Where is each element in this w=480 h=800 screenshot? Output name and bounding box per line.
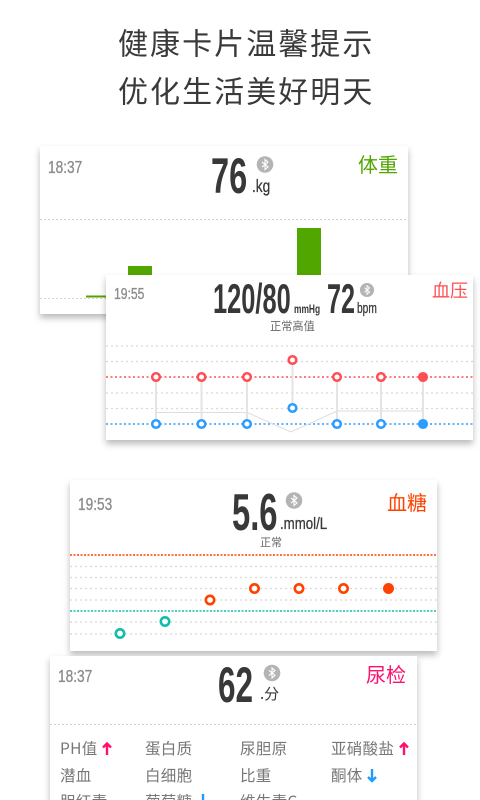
weight time: 18:37 xyxy=(48,158,82,178)
glucose value: 5.6 xyxy=(232,485,278,542)
glucose unit: .mmol/L xyxy=(280,515,327,533)
urine items: 酮体 xyxy=(331,764,363,786)
urine items: 比重 xyxy=(240,764,272,786)
weight unit: .kg xyxy=(252,177,270,197)
bp value: 120/80 xyxy=(213,277,291,323)
title xyxy=(118,20,374,112)
urine label: 尿检 xyxy=(366,659,406,688)
bp unit: mmHg xyxy=(294,304,320,316)
bp label: 血压 xyxy=(432,277,468,303)
panel: blood pressure card xyxy=(106,275,473,440)
title: 优化生活美好明天 xyxy=(118,68,374,112)
icon: bluetooth glucose xyxy=(286,492,302,509)
panel: weight card xyxy=(40,146,408,314)
weight value: 76 xyxy=(211,148,247,204)
title: 健康卡片温馨提示 xyxy=(118,20,374,64)
glucose time: 19:53 xyxy=(78,495,112,515)
bp time: 19:55 xyxy=(114,285,145,304)
urine items xyxy=(60,737,394,800)
bp chart xyxy=(106,346,473,432)
bp status: 正常高值 xyxy=(270,318,315,334)
icon: bluetooth weight xyxy=(257,156,273,173)
icon: bluetooth bp xyxy=(360,283,374,297)
arrows xyxy=(103,743,408,800)
panel: urine test card xyxy=(50,656,417,800)
weight bar chart xyxy=(86,228,321,298)
urine items: 尿胆原 xyxy=(240,737,287,759)
glucose status: 正常 xyxy=(260,534,282,550)
urine time: 18:37 xyxy=(58,667,92,687)
panel: blood glucose card xyxy=(70,480,437,651)
weight label: 体重 xyxy=(358,149,398,178)
icon: bluetooth urine xyxy=(264,665,280,681)
glucose label: 血糖 xyxy=(387,487,427,516)
glucose chart xyxy=(70,555,437,638)
urine items: 亚硝酸盐 xyxy=(331,737,394,759)
bp pulse unit: bpm xyxy=(357,299,377,317)
urine items: 蛋白质 xyxy=(145,737,192,759)
urine value: 62 xyxy=(218,657,253,713)
urine items: 潜血 xyxy=(60,764,92,786)
bp pulse: 72 xyxy=(327,277,355,323)
urine items: PH值 xyxy=(60,737,98,759)
urine unit: .分 xyxy=(260,683,279,704)
urine items: 白细胞 xyxy=(145,764,192,786)
